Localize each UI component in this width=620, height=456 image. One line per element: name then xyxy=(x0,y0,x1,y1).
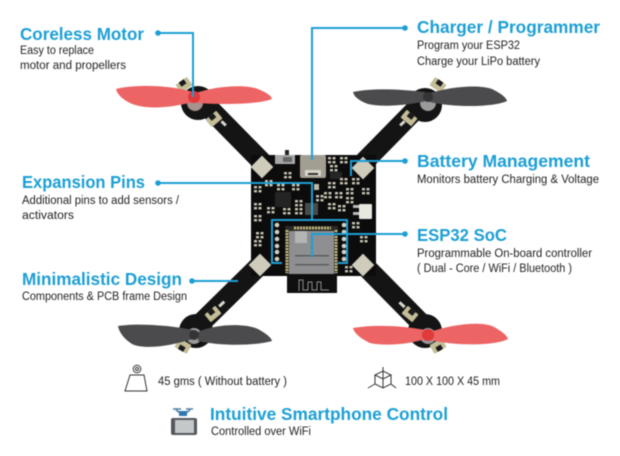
label: charger / programmer: Program your ESP32 xyxy=(417,40,520,52)
label: ESP32 SoC: Programmable On-board controller xyxy=(417,248,592,260)
label: expansion pins: Expansion Pins xyxy=(22,172,145,192)
text: controlled over WiFi: Controlled over WiFi xyxy=(211,426,311,438)
callout line: ESP32 xyxy=(312,231,408,257)
propeller: bottom right red xyxy=(353,324,508,345)
callout line: battery management xyxy=(351,158,408,176)
header pins right xyxy=(342,223,346,261)
dimensions text: 100 X 100 X 45 mm xyxy=(405,376,500,388)
small components xyxy=(254,157,370,272)
ESP32 module xyxy=(285,226,338,274)
weight text: 45 gms ( Without battery ) xyxy=(158,376,287,388)
callout line: expansion pins xyxy=(155,180,347,263)
label: coreless motor: motor and propellers xyxy=(20,60,126,72)
motor: top right xyxy=(400,77,447,126)
heading: intuitive smartphone control: Intuitive Smartphone Control xyxy=(210,404,448,424)
label: expansion pins xyxy=(22,172,180,222)
motor: top left xyxy=(175,77,223,127)
corner pads xyxy=(249,156,374,276)
slide switch xyxy=(275,150,295,164)
label: ESP32 SoC: ESP32 SoC xyxy=(417,225,507,245)
icon: drone and smartphone xyxy=(171,409,197,435)
PCB board xyxy=(249,150,376,276)
antenna tab xyxy=(287,274,337,293)
callout line: coreless motor xyxy=(155,30,193,97)
label: battery management: Battery Management xyxy=(417,151,590,171)
icon: weight xyxy=(125,365,147,391)
propeller: top right grey xyxy=(353,86,507,106)
drone arms xyxy=(202,104,420,322)
label: battery management: Monitors battery Charging & Voltage xyxy=(417,174,599,186)
label: minimalistic design: Components & PCB frame Design xyxy=(22,291,187,303)
USB connector xyxy=(300,155,326,178)
label: coreless motor: Easy to replace xyxy=(20,45,94,57)
motor: bottom left xyxy=(174,306,222,354)
battery connector xyxy=(353,204,372,219)
label: expansion pins: activators xyxy=(22,210,74,222)
label: ESP32 SoC xyxy=(417,225,592,275)
label: minimalistic design xyxy=(22,269,187,303)
callout line: minimalistic design xyxy=(189,278,238,284)
propeller: top left red xyxy=(116,86,272,107)
arm slots xyxy=(218,120,406,308)
label: battery management xyxy=(417,151,599,186)
label: ESP32 SoC: ( Dual - Core / WiFi / Bluetooth ) xyxy=(417,263,572,275)
label: expansion pins: Additional pins to add sensors / xyxy=(22,195,180,207)
label: coreless motor: Coreless Motor xyxy=(20,24,144,44)
motor: bottom right xyxy=(401,306,447,354)
icon: dimensions cube xyxy=(368,367,396,388)
IC chips xyxy=(275,172,342,215)
callout line: charger xyxy=(312,25,408,160)
header pins left xyxy=(275,223,279,261)
label: minimalistic design: Minimalistic Design xyxy=(22,269,182,289)
label: coreless motor xyxy=(20,24,144,72)
label: charger / programmer: Charge your LiPo battery xyxy=(417,56,540,68)
propeller: bottom left grey xyxy=(118,325,272,347)
label: charger / programmer: Charger / Programmer xyxy=(417,17,600,37)
label: charger / programmer xyxy=(417,17,600,68)
